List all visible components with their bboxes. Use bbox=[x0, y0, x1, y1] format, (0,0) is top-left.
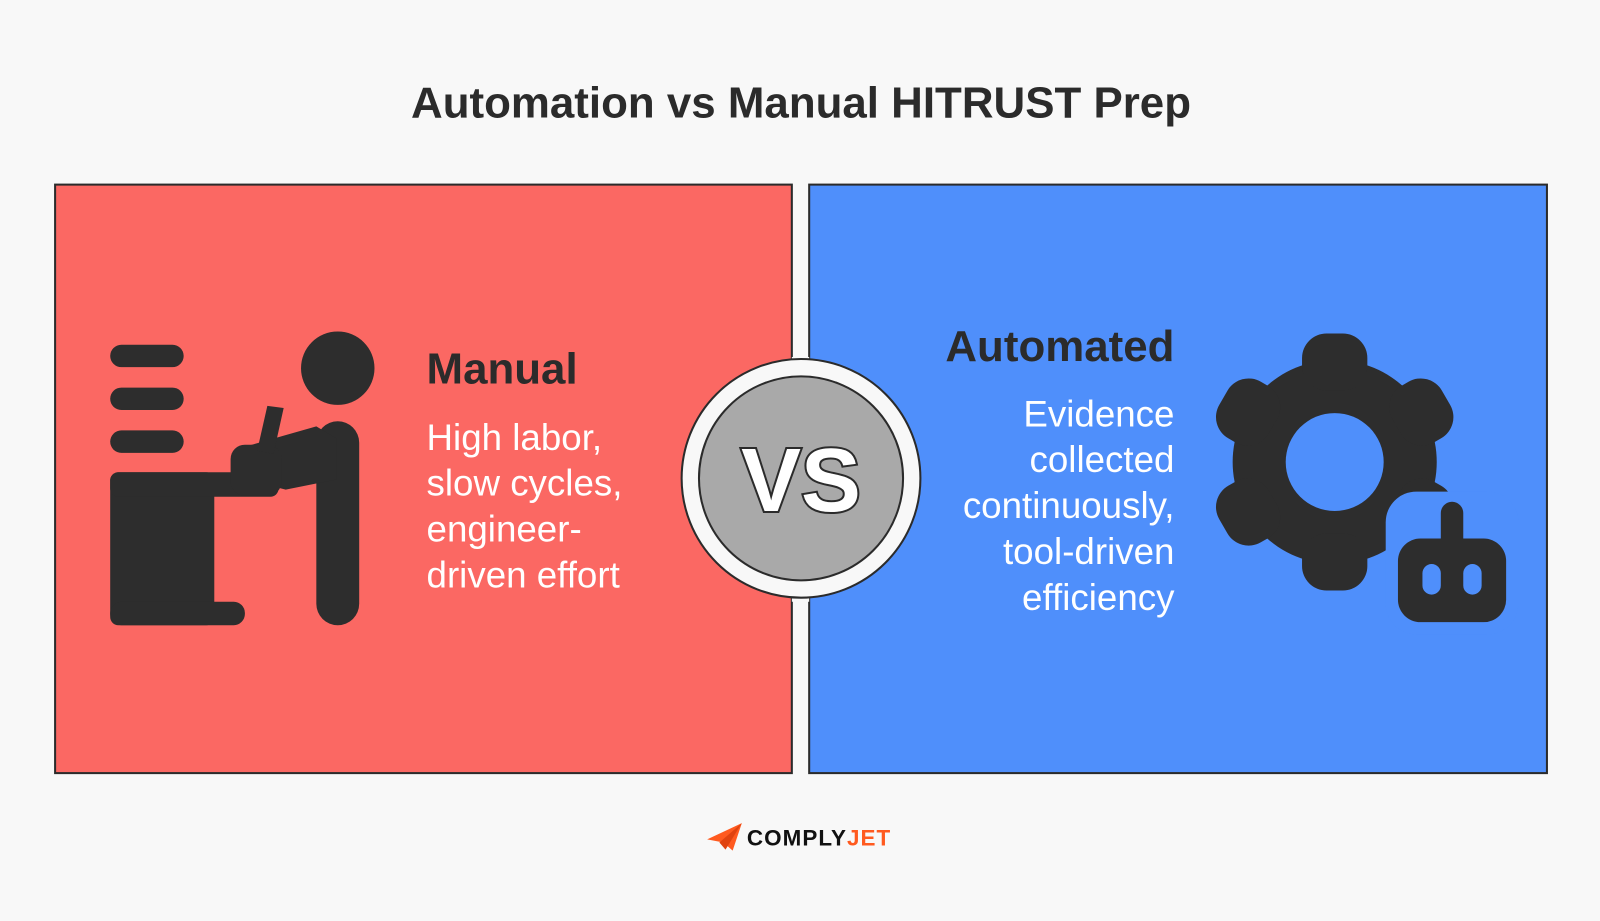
text: automated body: continuously, bbox=[963, 485, 1174, 526]
text: automated heading: Automated bbox=[945, 322, 1174, 371]
icon: person at desk bbox=[110, 331, 374, 625]
panel: manual bbox=[55, 185, 792, 773]
icon: vs badge bbox=[682, 357, 920, 602]
text: automated body: efficiency bbox=[1022, 577, 1175, 618]
text: manual heading: Manual bbox=[427, 345, 578, 393]
text: manual body: High labor, bbox=[427, 417, 602, 458]
panel: automated bbox=[809, 185, 1547, 773]
text: automated body: collected bbox=[1030, 439, 1174, 480]
text: automated body: tool-driven bbox=[1003, 531, 1174, 572]
icon: gear with robot bbox=[1207, 334, 1518, 634]
text: automated body: Evidence bbox=[1023, 393, 1174, 434]
logo: complyjet: COMPLYJET bbox=[747, 826, 891, 851]
text: manual body: slow cycles, bbox=[427, 463, 622, 504]
text: manual body: driven effort bbox=[427, 554, 620, 595]
title: Automation vs Manual HITRUST Prep bbox=[411, 78, 1191, 127]
icon: vs badge: VS bbox=[741, 431, 861, 531]
text: manual body: engineer- bbox=[427, 509, 582, 550]
